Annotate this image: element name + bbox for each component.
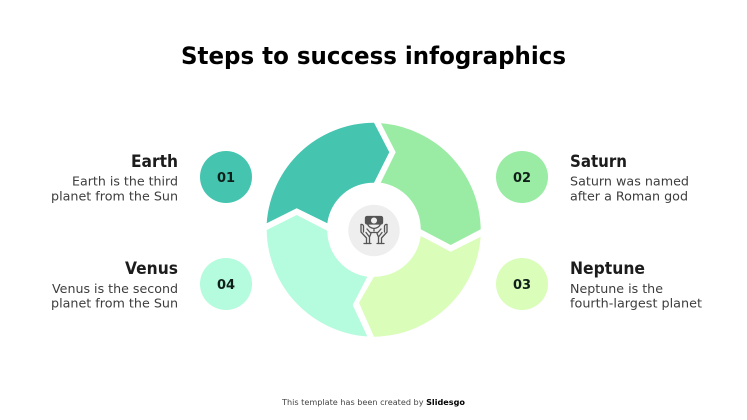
heading: Neptune: Neptune [570, 259, 645, 278]
step 01: Earth [51, 151, 252, 204]
step 02: Saturn [496, 151, 689, 204]
segment 03: lime arrow [359, 236, 481, 337]
number badge 02 [496, 151, 548, 203]
number badge 03 [496, 258, 548, 310]
segment 02: green arrow [381, 123, 481, 245]
heading: Venus: Venus [125, 259, 178, 278]
description: Saturn: after a Roman god [570, 190, 688, 204]
title: Steps to success infographics [181, 42, 566, 70]
footer credit: This template has been created by Slidesgo [281, 398, 466, 407]
heading: Saturn: Saturn [570, 152, 627, 171]
description: Neptune: Neptune is the [570, 282, 663, 296]
number badge 04 [200, 258, 252, 310]
number badge 01 [200, 151, 252, 203]
step 03: Neptune [496, 258, 702, 310]
segment 01: teal arrow [267, 123, 389, 223]
segment 04: mint arrow [267, 215, 367, 336]
description: Venus: planet from the Sun [51, 296, 178, 310]
heading: Earth: Earth [131, 152, 178, 171]
center icon: trophy held by hands [348, 205, 400, 256]
step 04: Venus [51, 258, 252, 310]
description: Earth: planet from the Sun [51, 190, 178, 204]
number badge 03: 03 [513, 278, 531, 293]
number badge 02: 02 [513, 171, 531, 186]
description: Venus: Venus is the second [52, 282, 178, 296]
description: Saturn: Saturn was named [570, 174, 689, 188]
cycle diagram [267, 123, 481, 337]
description: Earth: Earth is the third [72, 174, 178, 188]
number badge 04: 04 [217, 278, 235, 293]
number badge 01: 01 [217, 171, 235, 186]
description: Neptune: fourth-largest planet [570, 296, 702, 310]
